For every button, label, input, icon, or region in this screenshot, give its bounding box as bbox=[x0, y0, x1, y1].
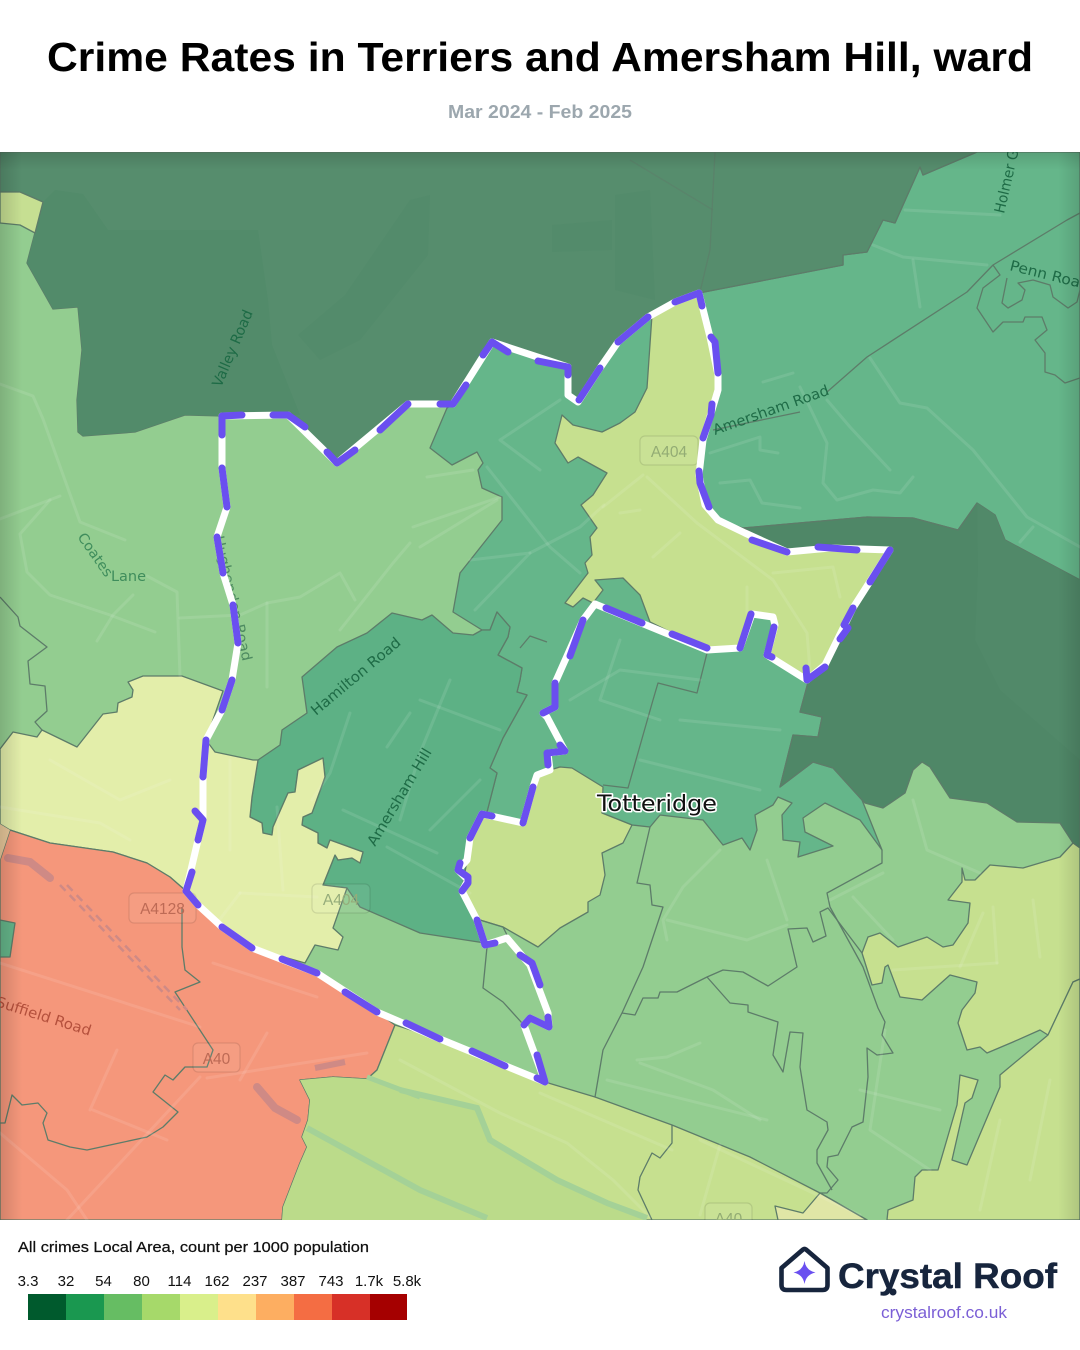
region: beige sliver by salmon bbox=[0, 824, 10, 860]
region: north-east medium green bbox=[699, 152, 1080, 580]
logo y-tail dot bbox=[890, 1288, 896, 1296]
region: south-east lime area bbox=[887, 979, 1080, 1220]
legend value labels: 80 bbox=[133, 1273, 150, 1290]
icon: house with star bbox=[782, 1249, 828, 1290]
region: central medium green bbox=[430, 315, 882, 857]
road label: Coates Lane bbox=[79, 534, 146, 581]
logo wordmark: Crystal Roof bbox=[838, 1257, 1057, 1296]
legend value labels: 387 bbox=[280, 1273, 306, 1290]
logo website: crystalroof.co.uk bbox=[881, 1304, 1008, 1322]
region: south lime lower meadow bbox=[282, 1077, 647, 1220]
legend value labels: 162 bbox=[204, 1273, 230, 1290]
legend value labels: 3.3 bbox=[18, 1273, 38, 1290]
region: north-west darkest forest bbox=[27, 234, 218, 436]
road shield: A40 town bbox=[193, 1043, 240, 1072]
road network bbox=[0, 210, 1080, 1220]
title: Crime Rates in Terriers and Amersham Hill, ward bbox=[47, 34, 1033, 80]
legend value labels: 114 bbox=[168, 1273, 191, 1290]
road label: Amersham Road: Amersham Road bbox=[711, 383, 831, 439]
road shield: A40 town: A40 bbox=[203, 1051, 231, 1068]
date range subtitle: Mar 2024 - Feb 2025 bbox=[448, 101, 632, 122]
road shield: A40 south: A40 bbox=[715, 1211, 743, 1228]
place label: Totteridge: Totteridge bbox=[596, 792, 717, 817]
road shield: A40 south bbox=[704, 1202, 752, 1220]
road label: Amersham Hill: Amersham Hill bbox=[365, 746, 436, 849]
region: surrounding light green base bbox=[0, 152, 1080, 1220]
road shield: A4128: A4128 bbox=[140, 901, 185, 918]
region: Totteridge lime area bbox=[462, 767, 632, 947]
road shield: A404 south bbox=[312, 884, 370, 913]
road shield: A404 north: A404 bbox=[651, 444, 687, 461]
region: woodland patches bbox=[298, 190, 655, 360]
ward boundary: white line with purple dashes bbox=[186, 293, 890, 1082]
road shield: A404 north bbox=[640, 436, 698, 465]
region: west pale yellow area bbox=[0, 676, 363, 963]
legend bbox=[18, 1239, 422, 1320]
rivers and rail details bbox=[8, 858, 647, 1218]
region: top-left lime patch bbox=[0, 192, 43, 233]
map edge shading bbox=[0, 152, 1080, 1220]
legend value labels: 1.7k bbox=[355, 1273, 384, 1290]
region: Amersham Hill darker green bbox=[250, 612, 527, 943]
area boundary lines bbox=[0, 152, 1080, 1220]
road label: Hughenden Road, mostly hidden by the boundary: Hughenden Road bbox=[210, 534, 254, 663]
road label: Coates Lane: Coates bbox=[74, 530, 116, 580]
legend value labels: 54 bbox=[95, 1273, 112, 1290]
region: south beige wedge bbox=[775, 1193, 867, 1220]
legend colour scale bbox=[28, 1294, 407, 1320]
logo: Crystal Roof bbox=[782, 1249, 1057, 1322]
legend value labels bbox=[18, 1273, 422, 1290]
road label: Valley Road: Valley Road bbox=[210, 308, 257, 390]
legend value labels: 32 bbox=[58, 1273, 74, 1290]
region: south lime band bbox=[282, 1025, 867, 1220]
region: eastern woodland lighter patch bbox=[975, 503, 1080, 760]
region: northern woodland dark green bbox=[0, 152, 977, 463]
legend value labels: 743 bbox=[318, 1273, 344, 1290]
region: town centre salmon bbox=[0, 830, 395, 1220]
road label: Hamilton Road: Hamilton Road bbox=[308, 635, 404, 719]
region: north-east lime ward area bbox=[555, 293, 890, 680]
road shield: A404 south: A404 bbox=[323, 892, 359, 909]
legend value labels: 237 bbox=[242, 1273, 268, 1290]
region: west edge green fragments bbox=[0, 920, 15, 957]
legend value labels: 5.8k bbox=[393, 1273, 422, 1290]
legend title: All crimes Local Area, count per 1000 population bbox=[18, 1239, 369, 1256]
region: east lime area bbox=[862, 843, 1080, 1053]
road label: Coates Lane: Lane bbox=[111, 569, 146, 585]
region: eastern woodland dark green bbox=[743, 503, 1080, 848]
road shield: A4128 bbox=[129, 893, 196, 923]
road label: Holmer Green: Holmer Green bbox=[992, 118, 1029, 215]
